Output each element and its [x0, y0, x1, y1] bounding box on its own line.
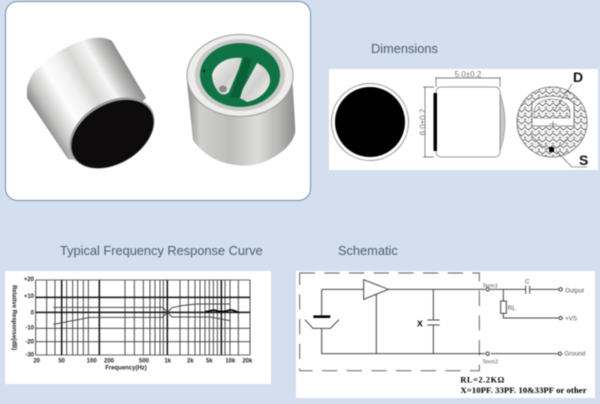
axis labels: -10	[25, 326, 35, 332]
back view: hatched circuit pattern with D and S pads	[517, 69, 588, 168]
resistor and capacitor values note	[460, 376, 587, 395]
schematic labels: Output	[565, 288, 584, 295]
circuit wiring	[322, 289, 485, 354]
schematic labels: Ground	[564, 350, 586, 357]
axis labels: 200	[104, 358, 115, 364]
heading: frequency response: Typical Frequency Response Curve	[60, 243, 263, 258]
microphone: top view with green circuit board	[187, 34, 295, 166]
axis labels: 50	[58, 358, 66, 364]
axis labels: +10	[24, 294, 35, 300]
back view: hatched circuit pattern with D and S pads: D	[573, 69, 583, 85]
axis labels: 2k	[187, 358, 194, 364]
heading: dimensions: Dimensions	[371, 41, 438, 56]
axis labels: -30	[25, 352, 35, 358]
microphone: angled body with black face	[27, 38, 167, 183]
resistor and capacitor values note: RL=2.2KΩ	[460, 376, 505, 385]
axis labels: -20	[25, 340, 35, 346]
axis labels: 0	[31, 310, 35, 316]
axis labels	[10, 277, 253, 372]
side view with dimension lines	[418, 70, 505, 157]
dashed capsule boundary	[300, 273, 479, 371]
response curves	[53, 304, 239, 324]
panel: schematic diagram	[296, 271, 595, 398]
axis labels: 100	[87, 358, 97, 364]
schematic labels: RL	[508, 305, 516, 312]
schematic labels: +VS	[565, 316, 577, 323]
amplifier triangle	[364, 280, 388, 299]
schematic labels: Term2	[482, 359, 498, 365]
front view: black circle	[332, 84, 408, 160]
panel: frequency response chart	[5, 271, 271, 384]
electret capsule symbol	[305, 317, 339, 328]
axis labels: 20	[33, 358, 41, 364]
heading: schematic: Schematic	[338, 243, 398, 258]
panel: product photo	[6, 2, 310, 200]
schematic labels	[417, 279, 586, 365]
axis labels: Frequency(Hz)	[105, 366, 147, 372]
axis labels: 1k	[164, 358, 172, 364]
side view with dimension lines: 6.0±0.2	[418, 108, 428, 135]
schematic labels: X	[417, 318, 423, 328]
schematic labels: C	[525, 279, 530, 286]
panel: dimensions drawing	[329, 69, 598, 170]
resistor and capacitor values note: X=10PF. 33PF. 10&33PF or other	[460, 386, 587, 395]
axis labels: +20	[24, 277, 35, 283]
capacitor X	[427, 320, 440, 325]
back view: hatched circuit pattern with D and S pads: S	[579, 152, 588, 168]
chart grid	[36, 280, 250, 355]
axis labels: Relative Response(dB)	[10, 285, 16, 350]
axis labels: 10k	[225, 358, 236, 364]
output network with resistor, capacitor and terminals	[486, 286, 562, 355]
schematic labels: Term1	[482, 283, 498, 289]
side view with dimension lines: 5.0±0.2	[455, 70, 482, 79]
axis labels: 500	[139, 358, 150, 364]
axis labels: 20k	[242, 358, 253, 364]
axis labels: 5k	[206, 358, 213, 364]
